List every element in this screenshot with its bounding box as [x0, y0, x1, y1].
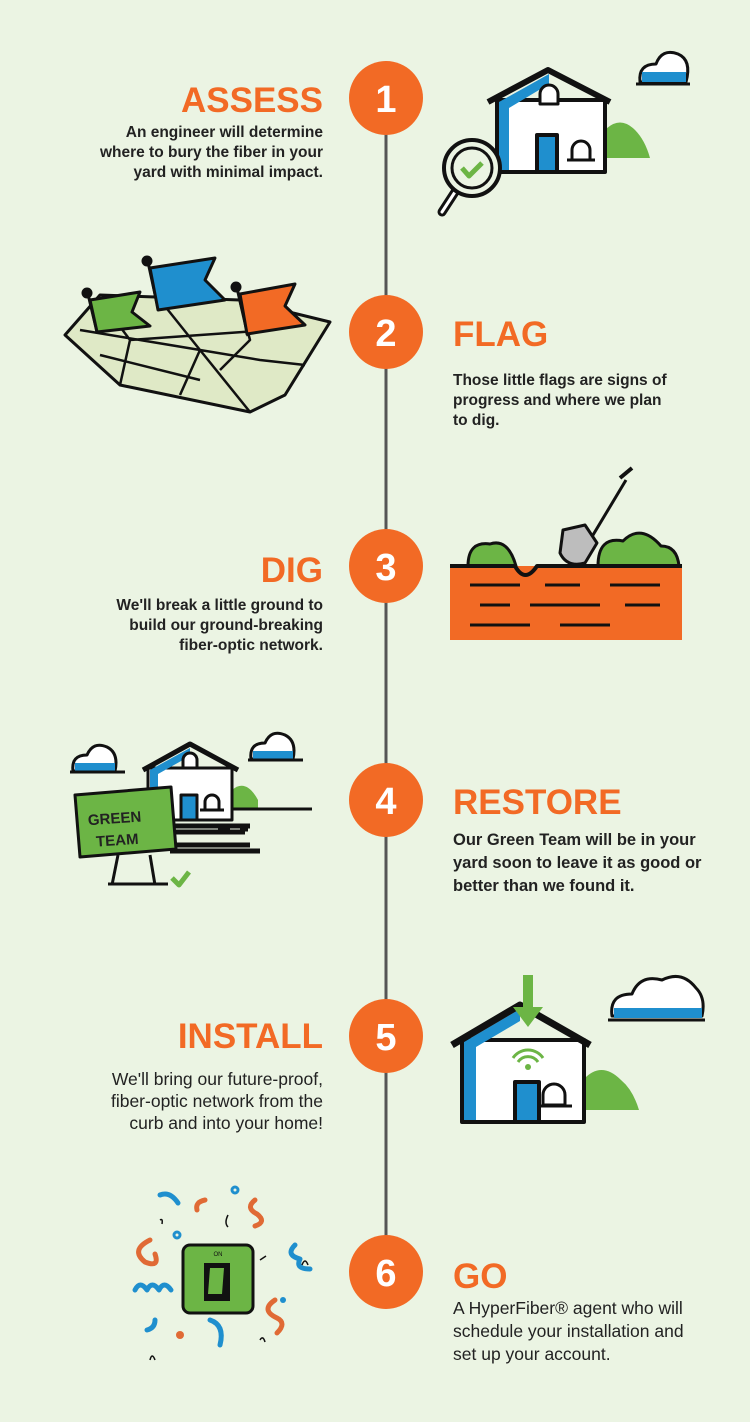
step 6 number — [349, 1235, 423, 1309]
step 5 text — [111, 1069, 323, 1133]
step 4 heading: RESTORE — [453, 783, 622, 822]
step 3 text: build our ground-breaking — [129, 617, 323, 634]
step 4 text — [453, 831, 702, 895]
step 6 number: 6 — [375, 1253, 397, 1295]
step 5 text: We'll bring our future-proof, — [112, 1069, 323, 1089]
step 2 text: to dig. — [453, 412, 500, 429]
step 1 number — [349, 61, 423, 135]
step 2 number: 2 — [375, 313, 397, 355]
step 3 text: fiber-optic network. — [179, 637, 323, 654]
step 3 text — [116, 597, 323, 654]
step 6 text: set up your account. — [453, 1344, 611, 1364]
step 5 heading: INSTALL — [178, 1017, 323, 1056]
step 3 number: 3 — [375, 547, 397, 589]
step 2 text — [453, 372, 667, 429]
step 2 text: Those little flags are signs of — [453, 372, 667, 389]
icon: flags on map — [65, 257, 330, 412]
step 2 text: progress and where we plan — [453, 392, 661, 409]
step 1 number: 1 — [375, 79, 397, 121]
step 4 text: yard soon to leave it as good or — [453, 854, 702, 872]
step 3 text: We'll break a little ground to — [116, 597, 323, 614]
step 4 number: 4 — [375, 781, 397, 823]
step 1 text: yard with minimal impact. — [134, 164, 323, 181]
step 4 text: better than we found it. — [453, 877, 634, 895]
icon: house with fiber arrow — [452, 975, 705, 1122]
step 5 number — [349, 999, 423, 1073]
step 1 text: where to bury the fiber in your — [99, 144, 323, 161]
step 4 number — [349, 763, 423, 837]
icon: restored yard with green team sign — [70, 733, 312, 885]
step 1 heading: ASSESS — [181, 81, 323, 120]
step 5 number: 5 — [375, 1017, 397, 1059]
step 3 number — [349, 529, 423, 603]
step 1 text: An engineer will determine — [126, 124, 323, 141]
step 6 heading: GO — [453, 1257, 507, 1296]
step 6 text: A HyperFiber® agent who will — [453, 1298, 683, 1318]
step 5 text: fiber-optic network from the — [111, 1091, 323, 1111]
step 6 text — [453, 1298, 684, 1364]
step 2 heading: FLAG — [453, 315, 548, 354]
step 2 number — [349, 295, 423, 369]
step 4 text: Our Green Team will be in your — [453, 831, 696, 849]
icon: restored yard with green team sign: GREEN — [87, 809, 142, 829]
icon: digging ground — [450, 468, 682, 640]
icon: light switch with confetti: ON — [214, 1252, 222, 1258]
step 1 text — [99, 124, 323, 181]
step 6 text: schedule your installation and — [453, 1321, 684, 1341]
step 3 heading: DIG — [261, 551, 323, 590]
icon: light switch with confetti — [135, 1187, 310, 1360]
icon: restored yard with green team sign: TEAM — [96, 831, 139, 851]
icon: house with magnifier — [442, 52, 690, 212]
step 5 text: curb and into your home! — [129, 1113, 323, 1133]
